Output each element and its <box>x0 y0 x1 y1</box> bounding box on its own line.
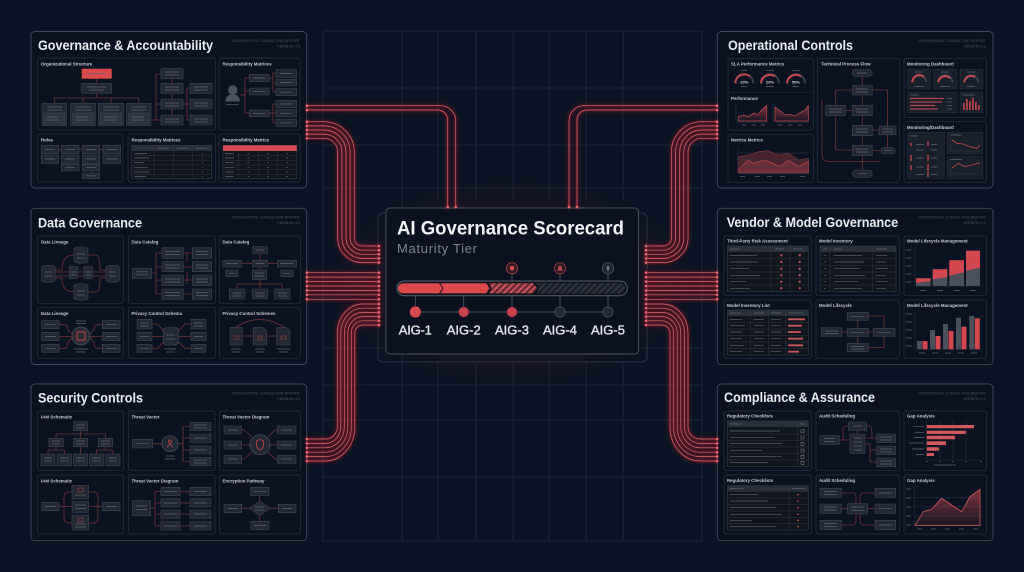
responsibility metrics table <box>219 134 300 182</box>
tier labels: AIG-4 <box>543 322 577 338</box>
report note: VERSION 4.3 <box>963 221 986 225</box>
report note: CONFIDENTIAL CONSULTING REPORT <box>232 216 301 220</box>
heading: Compliance & Assurance <box>724 389 875 405</box>
report note: CONFIDENTIAL CONSULTING REPORT <box>232 392 301 396</box>
center glow <box>332 177 692 387</box>
regulatory checklists table: Regulatory Checklists <box>727 478 774 483</box>
threat vector <box>128 411 215 471</box>
panel: data governance <box>31 208 307 364</box>
report note <box>232 216 301 225</box>
sla performance metrics <box>728 58 813 130</box>
heading: Operational Controls <box>728 37 853 53</box>
model inventory <box>816 236 899 296</box>
sla performance metrics: Performance <box>731 96 758 101</box>
threat vector diagram radial <box>219 411 300 471</box>
model inventory: Model Inventory <box>819 238 853 244</box>
data catalog network <box>219 236 300 303</box>
heading: Data Governance <box>38 214 142 230</box>
monitoring dashboard lower: Monitoring/Dashboard <box>907 125 954 130</box>
responsibility matrices table <box>128 134 216 182</box>
privacy control schema: Privacy Control Schema <box>132 311 183 316</box>
subtitle: Maturity Tier <box>397 241 478 256</box>
report note: CONFIDENTIAL CONSULTING REPORT <box>232 39 301 43</box>
privacy control schema <box>128 308 215 358</box>
report note: VERSION 4.3 <box>963 44 986 48</box>
report note: VERSION 4.3 <box>963 397 986 401</box>
model lifecycle: Model Lifecycle <box>819 303 852 308</box>
lifecycle grouped bars: Model Lifecycle Management <box>907 303 968 308</box>
tier labels: AIG-1 <box>399 322 432 338</box>
organizational structure: Organizational Structure <box>41 62 93 66</box>
technical process flow <box>817 58 899 182</box>
iam schematic tree <box>38 411 123 471</box>
organizational structure <box>38 58 216 130</box>
tier labels: AIG-3 <box>495 322 529 338</box>
privacy control schemes: Privacy Control Schemes <box>222 311 276 316</box>
tier labels: AIG-2 <box>447 322 481 338</box>
progress bar <box>397 281 627 296</box>
report note: VERSION 4.3 <box>277 44 300 48</box>
gauges <box>735 70 805 86</box>
report note: CONFIDENTIAL CONSULTING REPORT <box>918 392 987 396</box>
data lineage cylinders: Data Lineage <box>41 240 69 244</box>
heading: Security Controls <box>38 389 143 405</box>
gap analysis area chart: Gap Analysis <box>907 478 935 483</box>
monitoring dashboard upper <box>904 58 987 118</box>
report note <box>232 392 301 401</box>
third-party risk assessment: Third-Party Risk Assessment <box>727 238 788 244</box>
gauges: 20% <box>766 80 774 84</box>
report note: CONFIDENTIAL CONSULTING REPORT <box>918 216 987 220</box>
gap analysis bars: Gap Analysis <box>907 414 935 418</box>
panel: compliance and assurance <box>717 384 993 541</box>
lifecycle bar chart: Model Lifecycle Management <box>907 238 968 244</box>
iam schematic flow <box>38 475 123 534</box>
gauges: 50% <box>792 80 800 84</box>
report note <box>232 39 301 48</box>
roles <box>38 134 123 182</box>
circuit traces <box>307 106 717 461</box>
metrics chart: Metrics Metrics <box>731 138 764 142</box>
data lineage cylinders <box>38 236 123 303</box>
monitoring dashboard upper: Monitoring Dashboard <box>907 62 954 66</box>
report note: CONFIDENTIAL CONSULTING REPORT <box>918 39 987 43</box>
performance charts <box>736 103 809 125</box>
report note: VERSION 4.3 <box>277 397 300 401</box>
panel: center scorecard <box>378 208 647 362</box>
threat vector: Threat Vector <box>132 414 160 420</box>
encryption pathway: Encryption Pathway <box>222 478 265 484</box>
data catalog hierarchy: Data Catalog <box>132 240 159 244</box>
threat vector diagram tree <box>128 475 215 534</box>
heading: Governance & Accountability <box>38 37 213 53</box>
threat vector diagram radial: Threat Vector Diagram <box>222 414 269 420</box>
data lineage hub: Data Lineage <box>41 311 69 316</box>
responsibility metrics table: Responsibility Metrics <box>222 138 270 142</box>
report note <box>918 216 987 225</box>
privacy control schemes <box>219 308 300 358</box>
gap analysis area chart <box>904 475 987 534</box>
audit scheduling hub: Audit Scheduling <box>819 478 855 483</box>
regulatory checklists <box>724 411 811 471</box>
iam schematic flow: IAM Schematic <box>41 478 73 484</box>
model inventory list: Model Inventory List <box>727 303 770 308</box>
metrics chart <box>728 134 813 182</box>
data catalog hierarchy <box>128 236 215 303</box>
roles: Roles <box>41 138 54 142</box>
threat vector diagram tree: Threat Vector Diagram <box>132 478 178 484</box>
gauges: 20% <box>740 80 749 84</box>
sla performance metrics: SLA Performance Metrics <box>731 62 785 66</box>
gap analysis bars <box>904 411 987 471</box>
tier icons <box>415 263 614 307</box>
panel: governance and accountability <box>31 32 307 188</box>
technical process flow: Technical Process Flow <box>821 62 871 66</box>
title: AI Governance Scorecard <box>397 218 624 240</box>
panel: operational controls <box>717 32 993 188</box>
data catalog network: Data Catalog <box>222 240 250 244</box>
audit scheduling network: Audit Scheduling <box>819 414 855 418</box>
audit scheduling hub <box>816 475 899 534</box>
data lineage hub <box>38 308 123 358</box>
tier labels: AIG-5 <box>591 322 625 338</box>
tier labels <box>399 322 625 338</box>
responsibility matrices org tree: Responsibility Matrices <box>222 62 272 66</box>
model lifecycle <box>816 300 899 358</box>
third-party risk assessment <box>724 236 811 296</box>
lifecycle grouped bars <box>904 300 987 358</box>
responsibility matrices table: Responsibility Matrices <box>132 138 181 142</box>
panel: vendor and model governance <box>717 208 993 365</box>
lifecycle bar chart <box>904 236 987 296</box>
report note <box>918 392 987 401</box>
background grid <box>323 31 702 541</box>
report note <box>918 39 987 48</box>
audit scheduling network <box>816 411 899 471</box>
monitoring dashboard lower <box>904 122 987 182</box>
iam schematic tree: IAM Schematic <box>41 414 73 420</box>
panel: security controls <box>31 384 307 541</box>
report note: VERSION 4.3 <box>277 221 300 225</box>
regulatory checklists table <box>724 475 811 534</box>
tier track <box>410 306 613 318</box>
connector end dots <box>307 106 717 461</box>
responsibility matrices org tree <box>219 58 300 130</box>
encryption pathway <box>219 475 300 534</box>
heading: Vendor & Model Governance <box>727 214 898 230</box>
model inventory list <box>724 300 811 358</box>
regulatory checklists: Regulatory Checklists <box>727 414 774 418</box>
